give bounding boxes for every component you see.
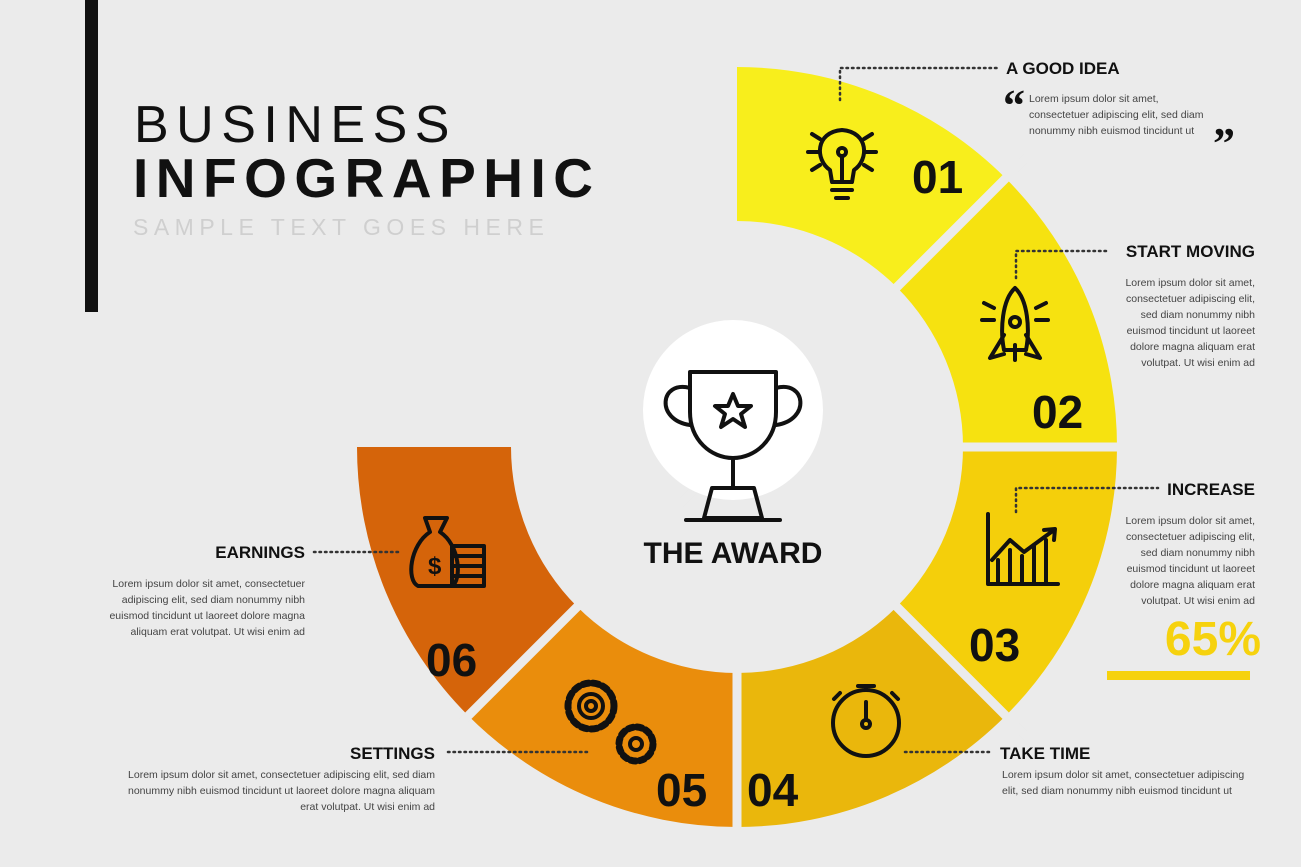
callout: start moving [1016, 242, 1255, 369]
segment 05 [468, 607, 737, 827]
callout: a good idea [840, 59, 1235, 168]
numbers: 05 [656, 764, 707, 816]
callout: a good idea: consectetuer adipiscing elit, sed diam [1029, 109, 1204, 121]
segment 02 [897, 178, 1117, 447]
callout: earnings: EARNINGS [215, 543, 305, 562]
callout: take time [905, 744, 1244, 797]
segment 06 [357, 447, 577, 716]
numbers [426, 151, 1083, 816]
callout: take time: elit, sed diam nonummy nibh euismod tincidunt ut [1002, 785, 1232, 797]
callout: earnings: Lorem ipsum dolor sit amet, consectetuer [112, 578, 305, 590]
callout: start moving: dolore magna aliquam erat [1130, 341, 1255, 353]
callout: a good idea: nonummy nibh euismod tincidunt ut [1029, 125, 1194, 137]
callout: increase: consectetuer adipiscing elit, [1126, 531, 1255, 543]
ring chart [357, 67, 1130, 840]
icon: trophy [666, 372, 800, 520]
icon: gears [568, 683, 653, 761]
callout: a good idea: “ [1003, 81, 1025, 130]
callout: take time: Lorem ipsum dolor sit amet, consectetuer adipiscing [1002, 769, 1244, 781]
callout: start moving: volutpat. Ut wisi enim ad [1141, 357, 1255, 369]
callout: settings [128, 744, 588, 813]
title: BUSINESS [134, 96, 457, 154]
stat: 65%: 65% [1165, 613, 1261, 666]
callout: increase: INCREASE [1167, 480, 1255, 499]
title bar [85, 0, 98, 312]
callout: earnings: euismod tincidunt ut laoreet dolore magna [109, 610, 305, 622]
callout: a good idea: ” [1213, 119, 1235, 168]
icon: money bag [411, 518, 484, 586]
icon: money bag: $ [428, 553, 442, 580]
segment 03 [897, 447, 1117, 716]
segment 04 [737, 607, 1006, 827]
callout: increase: euismod tincidunt ut laoreet [1127, 563, 1255, 575]
numbers: 04 [747, 764, 799, 816]
callout: increase: volutpat. Ut wisi enim ad [1141, 595, 1255, 607]
callout: earnings: aliquam erat volutpat. Ut wisi enim ad [130, 626, 305, 638]
numbers: 03 [969, 619, 1020, 671]
callout: a good idea: A GOOD IDEA [1006, 59, 1120, 78]
callout: start moving: euismod tincidunt ut laoreet [1127, 325, 1255, 337]
center award badge: THE AWARD [644, 537, 822, 570]
icon: lightbulb [808, 130, 876, 198]
callout: increase: sed diam nonummy nibh [1141, 547, 1255, 559]
title [133, 96, 600, 240]
callout: settings: erat volutpat. Ut wisi enim ad [300, 801, 435, 813]
callout: earnings [109, 543, 400, 638]
callout: start moving: sed diam nonummy nibh [1141, 309, 1255, 321]
callout: settings: SETTINGS [350, 744, 435, 763]
callout: start moving: START MOVING [1126, 242, 1255, 261]
callout: increase: Lorem ipsum dolor sit amet, [1125, 515, 1255, 527]
callout: settings: Lorem ipsum dolor sit amet, consectetuer adipiscing elit, sed diam [128, 769, 435, 781]
center award badge [643, 320, 823, 570]
title: SAMPLE TEXT GOES HERE [133, 214, 549, 240]
numbers: 01 [912, 151, 963, 203]
title: INFOGRAPHIC [133, 147, 600, 209]
icon: stopwatch [833, 686, 899, 756]
segment 01 [737, 67, 1006, 287]
callout: increase: dolore magna aliquam erat [1130, 579, 1255, 591]
icon: chart [988, 514, 1058, 584]
callout: start moving: consectetuer adipiscing elit, [1126, 293, 1255, 305]
callout: take time: TAKE TIME [1000, 744, 1090, 763]
callout: start moving: Lorem ipsum dolor sit amet, [1125, 277, 1255, 289]
icon: rocket [982, 288, 1048, 360]
callout: settings: nonummy nibh euismod tincidunt ut laoreet dolore magna aliquam [128, 785, 435, 797]
callout: increase [1016, 480, 1261, 680]
numbers: 06 [426, 634, 477, 686]
callout: a good idea: Lorem ipsum dolor sit amet, [1029, 93, 1159, 105]
callout: earnings: adipiscing elit, sed diam nonummy nibh [122, 594, 305, 606]
numbers: 02 [1032, 386, 1083, 438]
